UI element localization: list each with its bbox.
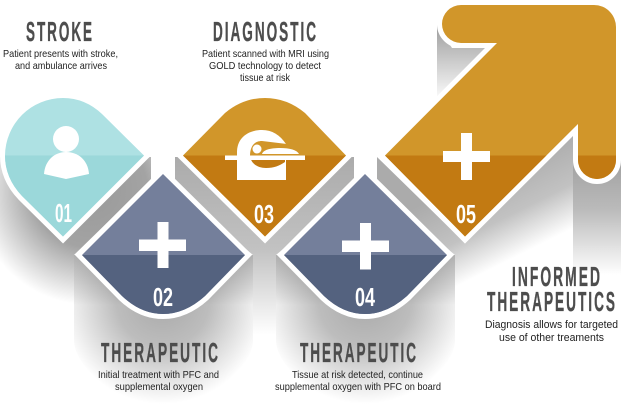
gold diamond shape [183, 98, 346, 236]
text block: therapeutic 02 [98, 337, 220, 393]
panel: step 05 arrow [385, 5, 616, 236]
text: THERAPEUTIC [101, 337, 220, 368]
slate diamond shape [82, 174, 245, 314]
description: informed therapeutics [485, 319, 618, 344]
text block: therapeutic 04: THERAPEUTIC [300, 337, 418, 368]
description: stroke [3, 49, 118, 72]
number 04: 04 [355, 282, 375, 312]
gold arrow shape [385, 5, 616, 236]
icon: plus [342, 223, 389, 270]
number 03: 03 [254, 199, 274, 229]
description: diagnostic: tissue at risk [240, 73, 291, 84]
description: stroke: and ambulance arrives [15, 61, 107, 72]
description: informed therapeutics: use of other treaments [499, 332, 604, 344]
text block: stroke: STROKE [26, 16, 94, 47]
heading: informed therapeutics [487, 261, 617, 317]
description: therapeutic 02 [98, 370, 219, 393]
description: diagnostic: Patient scanned with MRI using [202, 49, 329, 60]
text block: therapeutic 04 [275, 337, 441, 393]
text block: stroke [3, 16, 118, 72]
slate diamond shape [284, 174, 447, 314]
number 05: 05 [456, 199, 476, 229]
icon: plus [443, 133, 490, 180]
panel: step 01 stroke [5, 98, 144, 236]
description: diagnostic: GOLD technology to detect [209, 61, 321, 72]
icon: plus [139, 222, 186, 268]
shadow: step 05 [377, 25, 621, 330]
description: therapeutic 02: supplemental oxygen [115, 382, 203, 393]
description: therapeutic 04 [275, 370, 441, 393]
shadow: step 04 [276, 255, 455, 408]
shadow: step 03 [175, 157, 354, 345]
teal pin shape [5, 98, 144, 236]
number 02: 02 [153, 282, 173, 312]
text block: diagnostic [202, 16, 329, 84]
text block: informed therapeutics [485, 261, 618, 344]
shadow: step 01 [0, 157, 151, 330]
shadow: step 02 [74, 255, 253, 408]
description: stroke: Patient presents with stroke, [3, 49, 118, 60]
description: therapeutic 04: supplemental oxygen with PFC on board [275, 382, 441, 393]
panel: step 04 therapeutic [284, 174, 447, 314]
panel: step 02 therapeutic [82, 174, 245, 314]
panel: step 03 diagnostic [183, 98, 346, 236]
icon: person [44, 126, 89, 179]
text block: diagnostic: DIAGNOSTIC [213, 16, 318, 47]
description: therapeutic 02: Initial treatment with PFC and [98, 370, 219, 381]
icon: MRI scanner [225, 130, 305, 180]
description: diagnostic [202, 49, 329, 84]
number 01: 01 [55, 198, 72, 228]
description: therapeutic 04: Tissue at risk detected, continue [292, 370, 423, 381]
